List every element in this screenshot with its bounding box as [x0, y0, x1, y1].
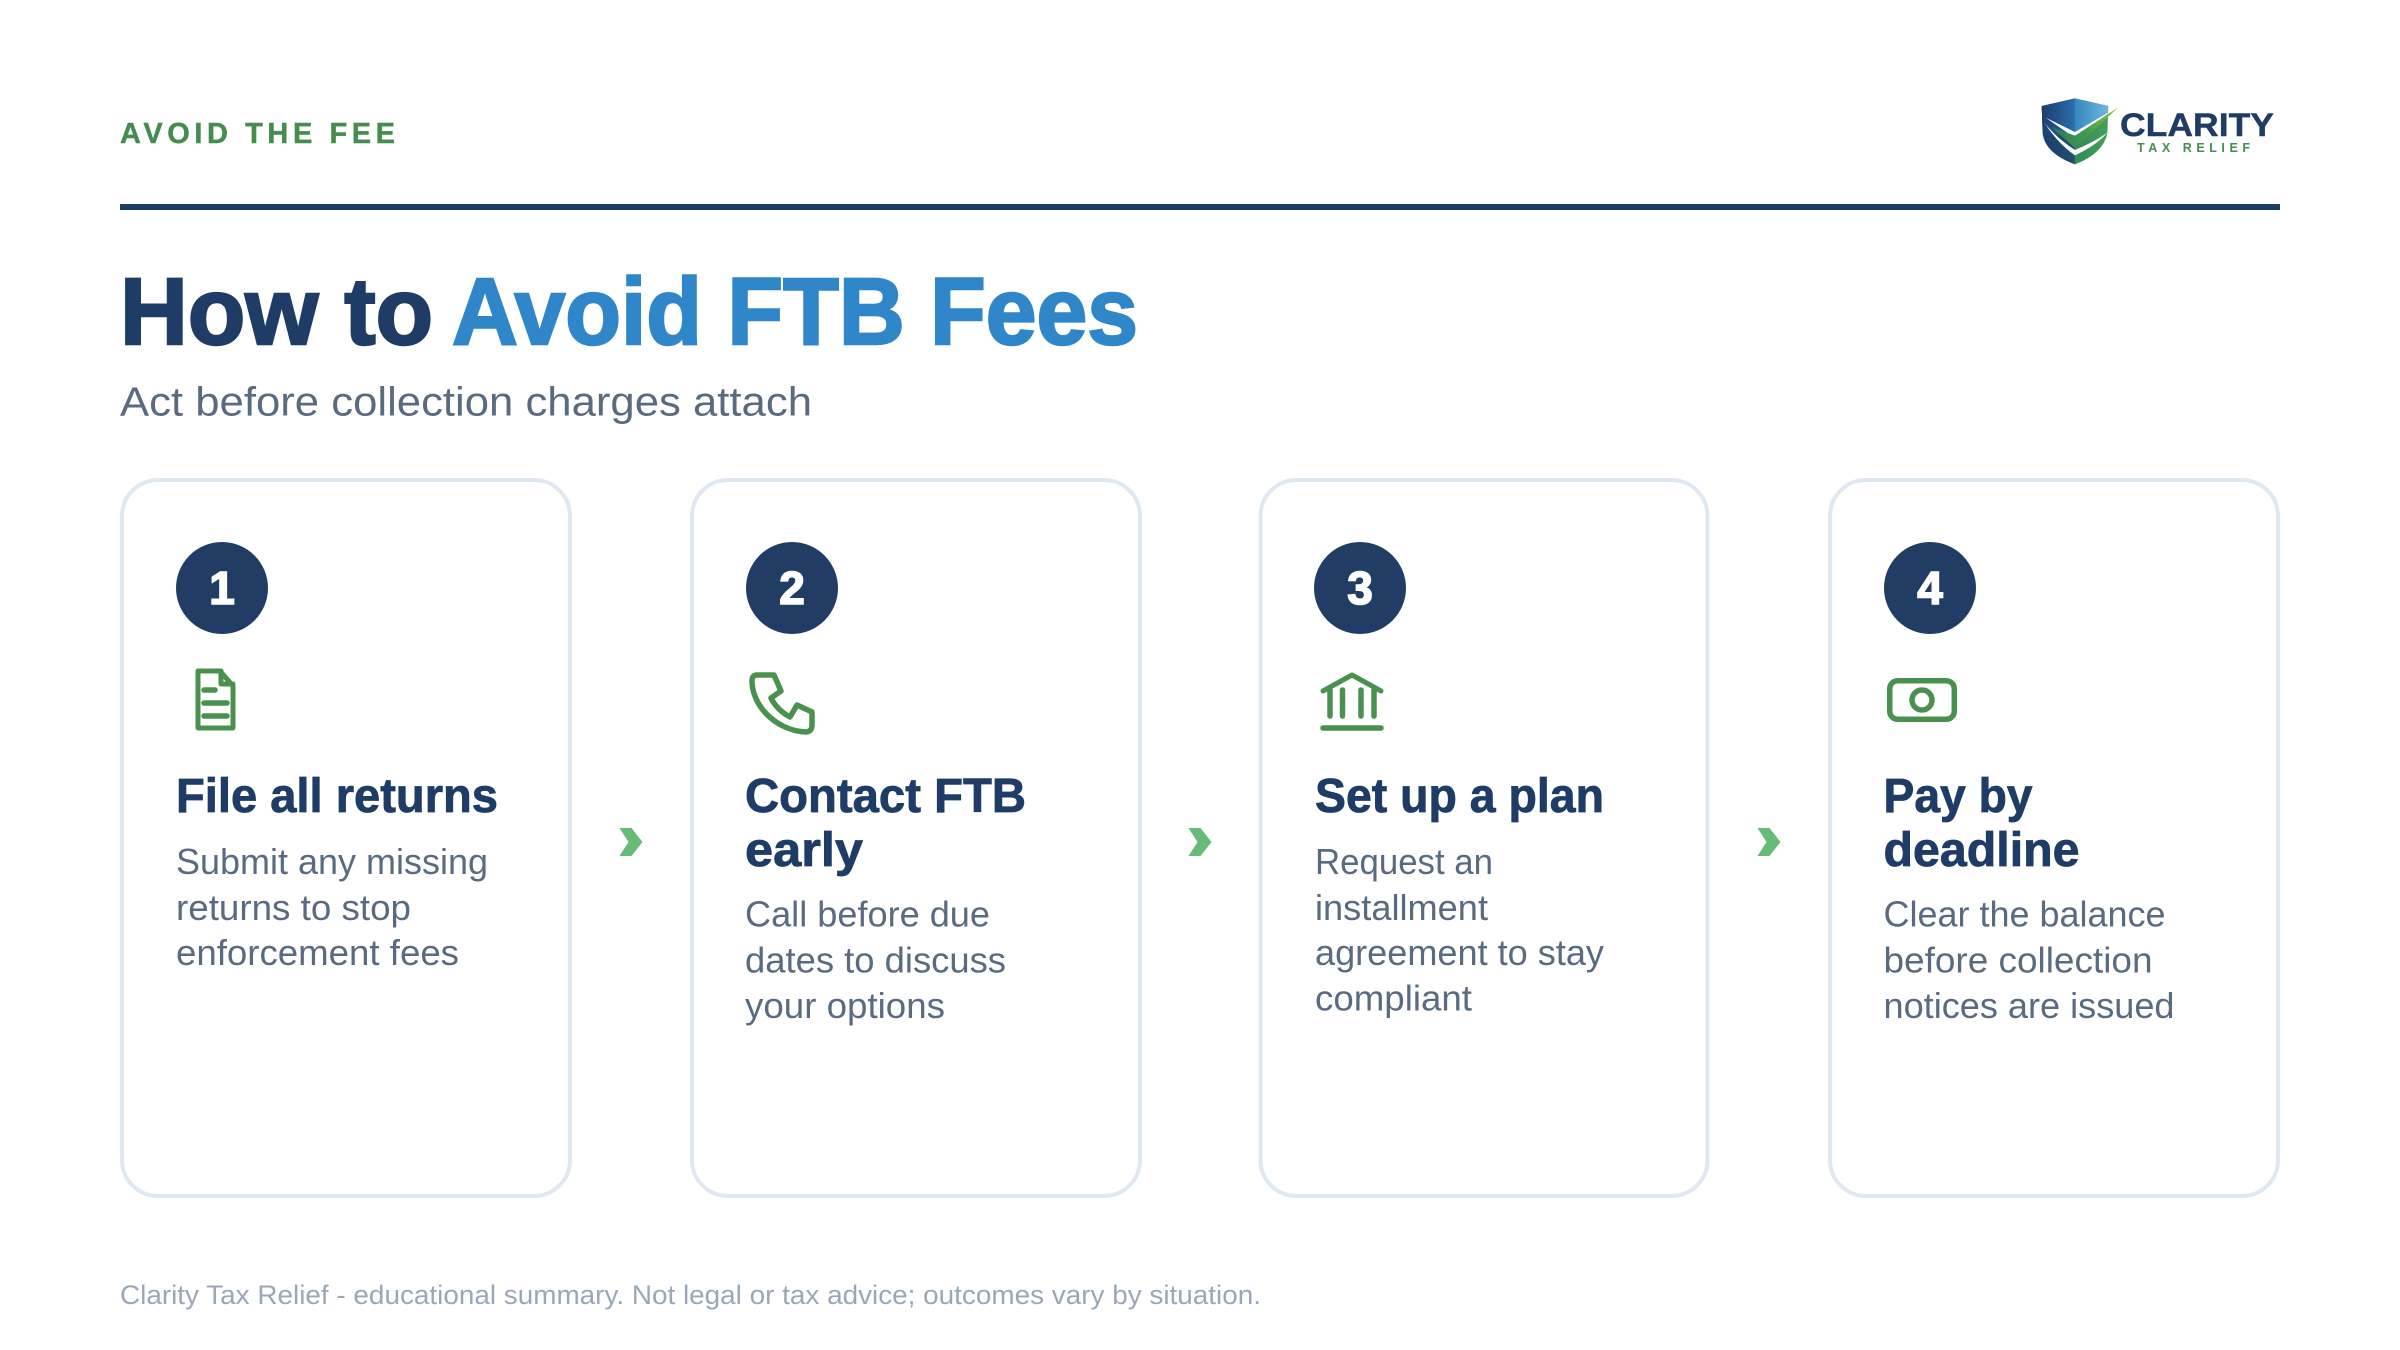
- title: How to: [120, 259, 433, 365]
- step 4 heading: Pay by: [1884, 770, 2033, 823]
- arrow 1: [620, 828, 642, 856]
- step 1 description: Submit any missing: [176, 841, 488, 882]
- subtitle: Act before collection charges attach: [120, 378, 812, 424]
- title: Avoid FTB Fees: [452, 259, 1138, 365]
- panel: step 2 contact FTB early: [692, 480, 1140, 1196]
- step 4 heading: [1884, 770, 2080, 877]
- step 2 description: dates to discuss: [745, 940, 1006, 980]
- step 2 heading: [745, 770, 1026, 877]
- step 2 heading: Contact FTB: [745, 770, 1026, 823]
- step number 3: [1314, 542, 1406, 634]
- logo tagline: TAX RELIEF: [2137, 141, 2250, 155]
- step 3 description: [1315, 841, 1604, 1018]
- step 2 description: [745, 894, 1006, 1026]
- logo wordmark: CLARITY: [2120, 107, 2274, 143]
- step number 1: [176, 542, 268, 634]
- step number 2: [746, 542, 838, 634]
- step 1 description: [176, 841, 488, 973]
- logo shield icon: [2042, 98, 2118, 164]
- step 2 description: Call before due: [745, 894, 990, 934]
- step 4 description: notices are issued: [1884, 985, 2174, 1026]
- step number 4: 4: [1917, 562, 1943, 614]
- panel: step 3 set up a plan: [1260, 480, 1708, 1196]
- step 1 description: enforcement fees: [176, 932, 459, 973]
- step 4 description: before collection: [1884, 940, 2152, 980]
- icon: document: [198, 671, 233, 728]
- arrow 2: [1188, 828, 1212, 856]
- step number 2: 2: [779, 562, 805, 614]
- step number 1: 1: [209, 562, 235, 614]
- step 4 description: Clear the balance: [1884, 894, 2166, 934]
- title: [120, 259, 1138, 365]
- step 2 heading: early: [745, 824, 863, 877]
- step 2 description: your options: [745, 985, 945, 1026]
- logo: Clarity Tax Relief: [2042, 98, 2274, 164]
- step 1 heading: File all returns: [176, 770, 498, 823]
- arrow 3: [1758, 828, 1780, 856]
- step 3 description: Request an: [1315, 841, 1493, 882]
- eyebrow label: AVOID THE FEE: [120, 118, 395, 150]
- step 4 heading: deadline: [1884, 824, 2080, 877]
- step number 3: 3: [1347, 562, 1373, 614]
- icon: bank: [1323, 675, 1381, 728]
- step 1 description: returns to stop: [176, 887, 411, 928]
- step number 4: [1884, 542, 1976, 634]
- step 3 heading: Set up a plan: [1315, 770, 1604, 823]
- icon: money bill: [1890, 681, 1954, 719]
- icon: phone: [752, 675, 812, 732]
- panel: step 4 pay by deadline: [1830, 480, 2278, 1196]
- step 3 description: compliant: [1315, 978, 1472, 1018]
- step 4 description: [1884, 894, 2174, 1026]
- step 3 description: installment: [1315, 887, 1488, 928]
- step 3 description: agreement to stay: [1315, 932, 1604, 973]
- panel: step 1 file all returns: [122, 480, 570, 1196]
- footer disclaimer: Clarity Tax Relief - educational summary. Not legal or tax advice; outcomes vary by situation.: [120, 1280, 1261, 1310]
